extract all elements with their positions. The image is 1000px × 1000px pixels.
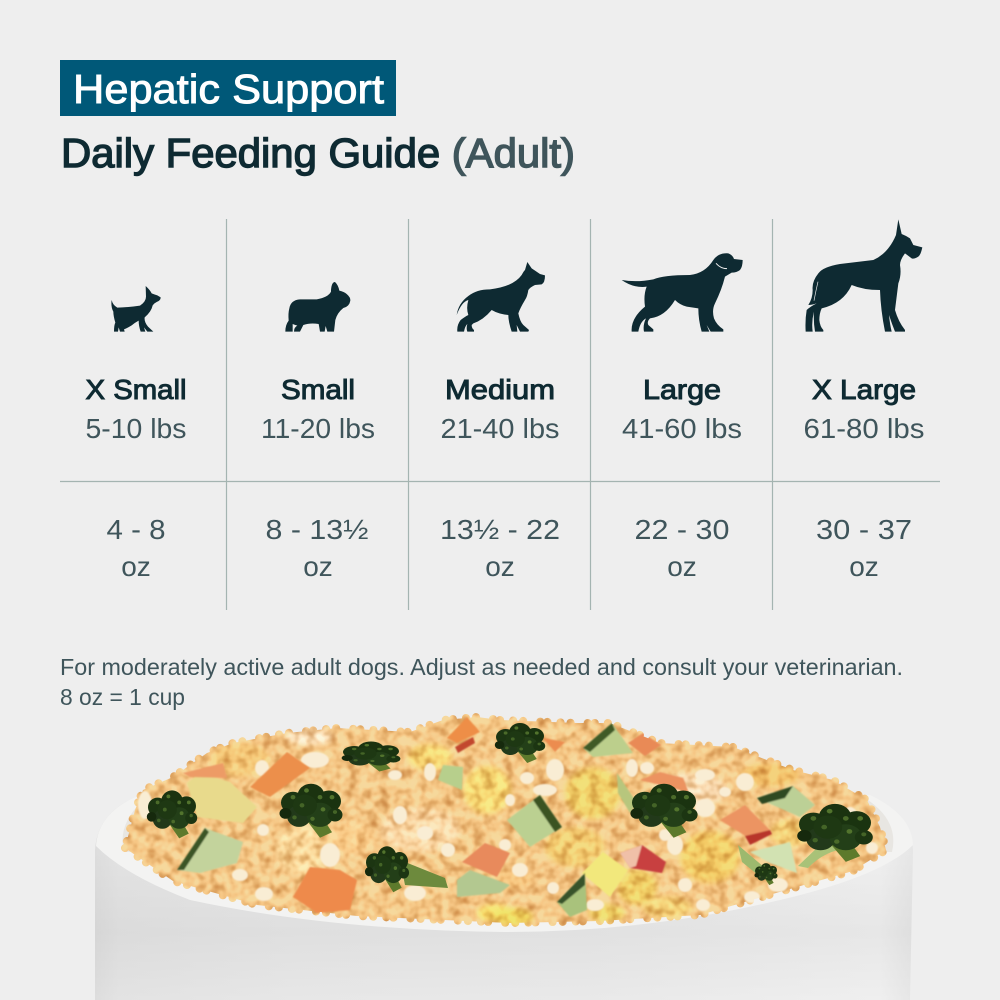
column: x large: X Large [812, 374, 916, 405]
column: medium: 13½ - 22 [440, 514, 560, 545]
broccoli florets [147, 723, 873, 892]
column: x large: 30 - 37 [816, 514, 912, 545]
column: small: 11-20 lbs [261, 413, 375, 444]
bowl [95, 785, 913, 1000]
zucchini [177, 828, 243, 873]
icon: small dog [285, 282, 350, 332]
column: x small: 4 - 8 [106, 514, 166, 545]
column: medium: Medium [445, 374, 555, 405]
carrots [250, 752, 310, 797]
icon: medium dog [457, 262, 545, 332]
column: large: Large [643, 374, 721, 405]
column: x large [804, 374, 924, 582]
footnote: 8 oz = 1 cup [60, 684, 185, 710]
yellow squash [187, 773, 257, 823]
footnote: For moderately active adult dogs. Adjust as needed and consult your veterinarian. [60, 654, 903, 680]
column: x small: 5-10 lbs [86, 413, 186, 444]
chunks: potato and squash [198, 729, 810, 926]
column: x large: 61-80 lbs [804, 413, 924, 444]
rice texture [121, 713, 888, 927]
column: x large: oz [849, 551, 879, 582]
column: large: 41-60 lbs [622, 413, 742, 444]
column: small: oz [303, 551, 333, 582]
column: x small [86, 374, 186, 582]
column: medium: 21-40 lbs [440, 413, 560, 444]
column: small: 8 - 13½ [266, 514, 368, 545]
food [121, 713, 888, 927]
footnote [60, 654, 903, 710]
column: large: oz [667, 551, 697, 582]
heading: Daily Feeding Guide (Adult): Daily Feeding Guide (Adult) [61, 130, 575, 176]
column: large [622, 374, 742, 582]
red apple [630, 844, 667, 874]
column: small [261, 374, 375, 582]
column: small: Small [281, 374, 355, 405]
icon: large dog [622, 253, 743, 332]
rice grains [138, 752, 878, 911]
column: x small: oz [121, 551, 151, 582]
column: medium [440, 374, 560, 582]
icon: x small dog [111, 286, 161, 332]
bowl of food [95, 705, 913, 1000]
column: large: 22 - 30 [634, 514, 730, 545]
column: x small: X Small [86, 374, 186, 405]
feeding table [60, 219, 940, 610]
column: medium: oz [485, 551, 515, 582]
icon: x large dog [805, 219, 922, 332]
header badge: Hepatic Support: Hepatic Support [73, 66, 385, 112]
vegetable pieces [177, 717, 815, 917]
